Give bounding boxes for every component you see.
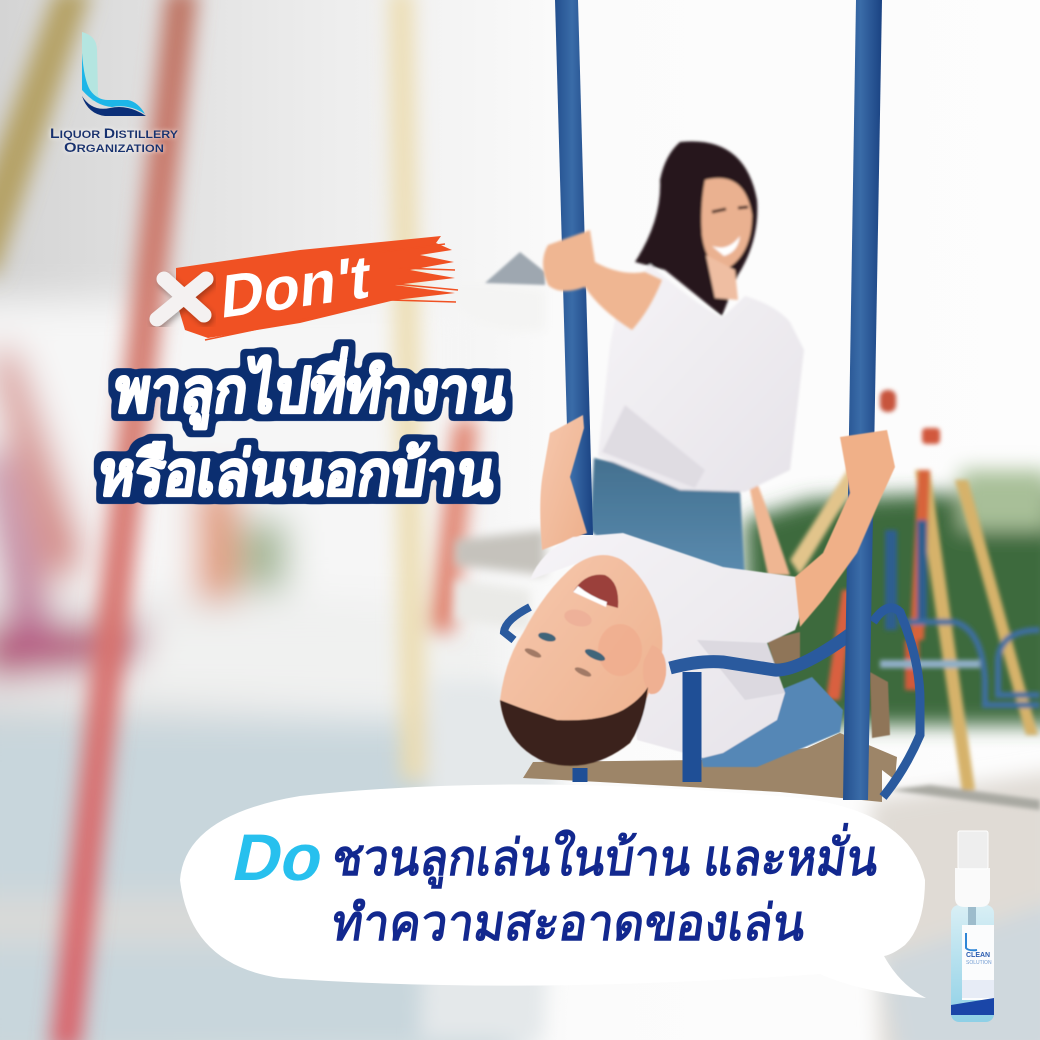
logo: Liquor Distillery Organization (50, 32, 179, 155)
white cross (157, 279, 206, 319)
orange brush stroke (176, 236, 455, 338)
do message (328, 823, 883, 951)
kid right arm and hand (795, 430, 895, 627)
label subtitle: SOLUTION (966, 960, 992, 966)
kid hair (500, 687, 648, 766)
kid shirt (530, 533, 805, 758)
product bottle (951, 831, 994, 1022)
kid head (500, 555, 662, 765)
logo wordmark (50, 125, 179, 155)
kid ear (643, 645, 666, 694)
left swing pole (555, 0, 593, 535)
logo wordmark: ORGANIZATION (64, 139, 164, 155)
mother hair (635, 141, 757, 316)
bottle cap (955, 868, 990, 907)
blue swing rail (504, 607, 920, 797)
headline: don't text: พาลูกไปที่ทำงาน (110, 347, 513, 429)
photo: child on swing (500, 415, 890, 767)
headline: don't text: หรือเล่นนอกบ้าน (94, 440, 500, 509)
kid left arm (540, 415, 587, 550)
mother shirt (598, 264, 804, 492)
mother face (701, 178, 752, 270)
brush streaks (205, 244, 458, 340)
label band (951, 998, 994, 1015)
kid nose (562, 607, 594, 629)
do message: ชวนลูกเล่นในบ้าน และหมั่น (328, 823, 883, 888)
speech bubble (180, 784, 926, 998)
bottle tube (968, 900, 976, 930)
label mark (966, 933, 977, 950)
headline: don't text (94, 347, 513, 509)
bottle sprayer (958, 831, 988, 869)
kid boots (767, 632, 890, 738)
don't label: Don't (219, 242, 372, 331)
do label: Do (227, 822, 330, 895)
mother jeans (590, 458, 745, 580)
don't badge (157, 236, 458, 340)
bottle body (951, 905, 994, 1022)
blurred roof (485, 252, 545, 285)
kid eyes (537, 631, 607, 663)
label name: CLEAN (966, 952, 990, 959)
kid eyebrows (524, 646, 592, 679)
logo L mark (82, 32, 146, 116)
do text (227, 822, 883, 951)
mother right arm (748, 470, 790, 575)
bottle label (962, 925, 994, 1000)
kid cheek shadow (598, 624, 642, 676)
kid jeans (700, 677, 843, 767)
right swing pole (843, 0, 882, 800)
kid mouth (573, 575, 618, 608)
photo: wooden bench (523, 733, 897, 802)
mother left arm and hand (543, 230, 662, 330)
photo: mother behind the swing (590, 141, 804, 580)
do message: ทำความสะอาดของเล่น (328, 895, 809, 951)
logo wordmark: LIQUOR DISTILLERY (50, 125, 179, 141)
